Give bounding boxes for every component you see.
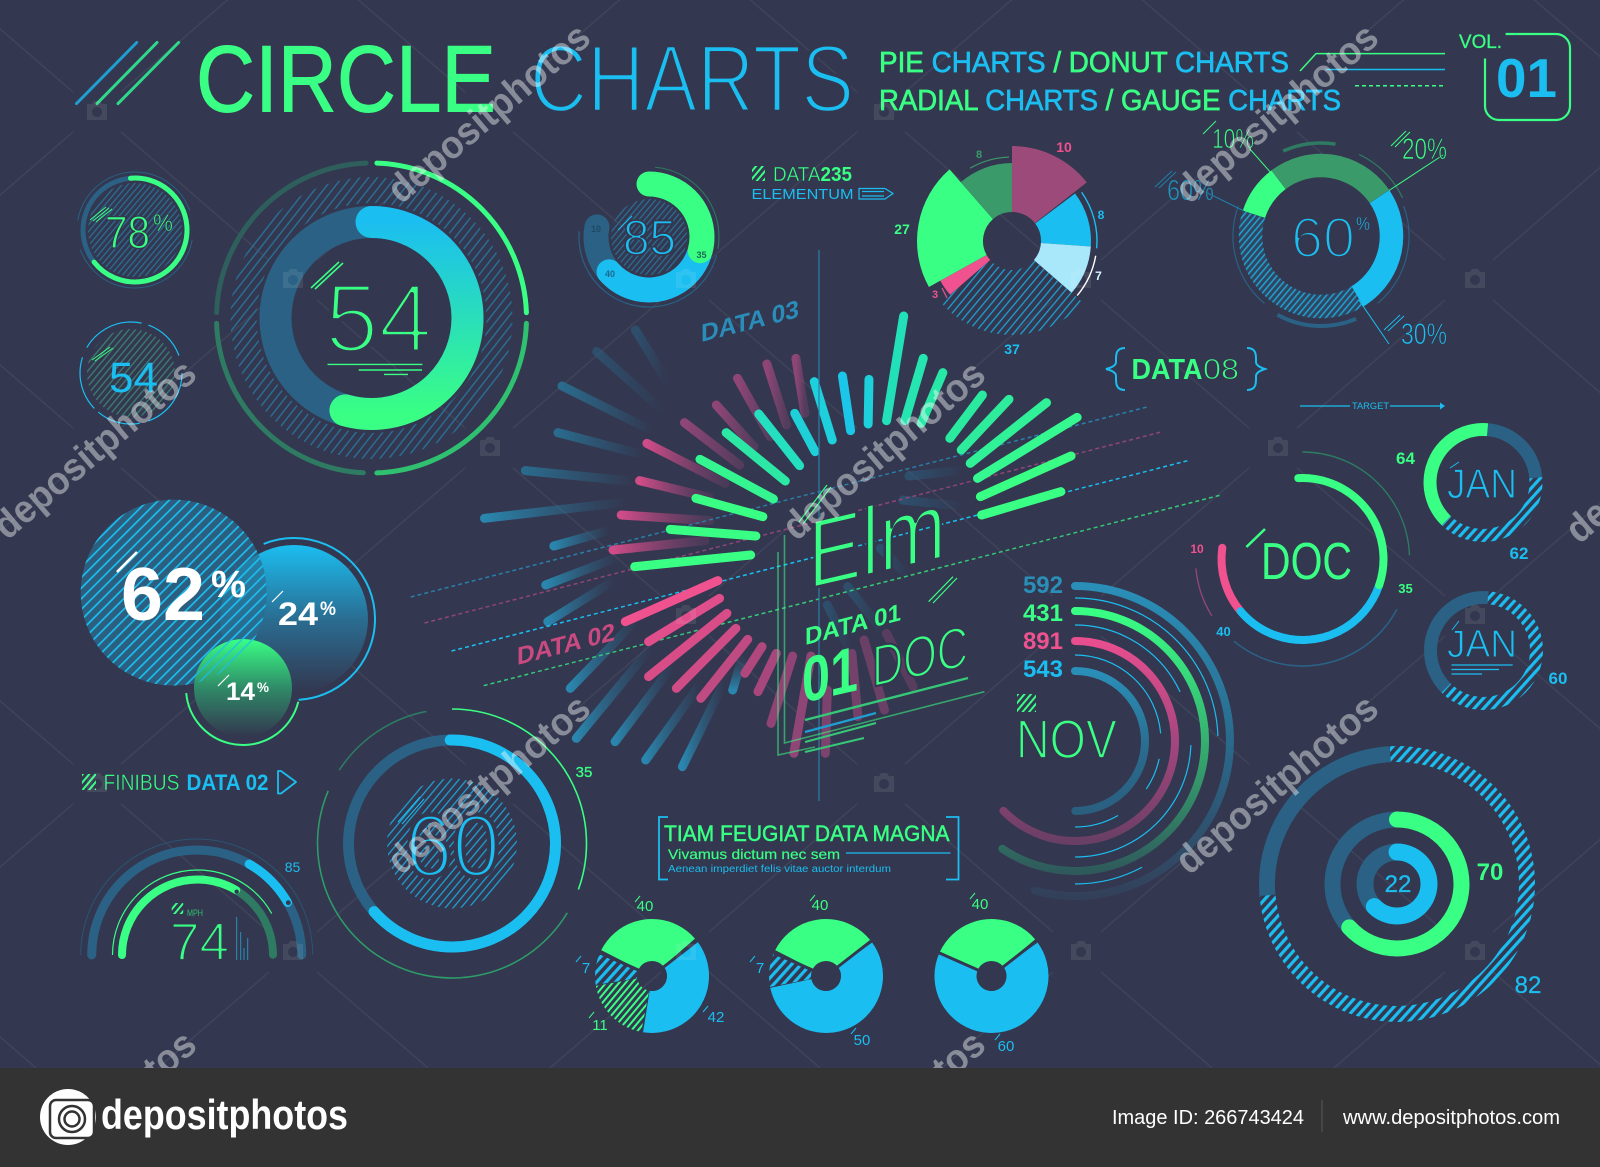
donut: 85: 40: [605, 269, 615, 279]
subtitle: chart types: RADIAL CHARTS / GAUGE CHARTS: [879, 85, 1341, 117]
text block: tiam feugiat: TIAM FEUGIAT DATA MAGNA: [664, 821, 950, 846]
label: finibus data 02: DATA 02: [186, 770, 268, 795]
radial chart: nov: 543: [1023, 656, 1063, 683]
circle labels: %: [211, 564, 246, 606]
pie: 40 7 11 42: 11: [592, 1017, 608, 1034]
volume badge: 01: [1496, 47, 1557, 109]
label: finibus data 02: [82, 770, 296, 795]
radial chart: nov: 431: [1023, 600, 1063, 627]
gauge: jan 60: [1409, 576, 1567, 725]
gauge: 78%: %: [153, 210, 173, 237]
footer bar: [0, 1068, 1600, 1167]
circle labels: %: [320, 599, 336, 620]
gauge: 78%: [68, 163, 202, 297]
text block: tiam feugiat: Aenean imperdiet felis vitae auctor interdum: [668, 864, 891, 875]
dashed data lines: [411, 407, 1221, 686]
gauge: 54 small: [80, 322, 182, 424]
volume badge: [1459, 32, 1570, 120]
donut: 85: 10: [591, 224, 601, 234]
circle labels: %: [257, 679, 270, 695]
circle labels: [117, 552, 336, 706]
watermark text: depositphotos: [379, 686, 599, 883]
burst: radial data lines: [484, 330, 966, 767]
pie: 40 7 11 42: 40: [637, 898, 653, 915]
donut: 85: 35: [696, 250, 707, 260]
circle labels: 24: [278, 596, 318, 632]
label: data235 elementum: ELEMENTUM: [752, 186, 854, 203]
label: data 02: DATA 02: [517, 618, 615, 671]
centre block: Elm data 01 doc: [778, 469, 984, 755]
gauge: doc: 40: [1216, 624, 1231, 639]
header rule lines: [1300, 54, 1445, 86]
donut: big 60: [266, 657, 638, 1030]
circle: 24%: [189, 514, 399, 724]
gauge: jan 64 62: JAN: [1447, 460, 1517, 507]
pie: 40 60: [939, 893, 1042, 1055]
gauge: doc: [1155, 412, 1450, 706]
icon: camera logo: [40, 1089, 96, 1145]
callout: 20%: 20%: [1402, 133, 1447, 166]
outer dim blue spokes: [484, 330, 966, 767]
text block: tiam feugiat: Vivamus dictum nec sem: [668, 846, 840, 862]
gauge: jan 64 62: [1396, 408, 1558, 563]
title: circle charts: [76, 26, 854, 132]
target arrow: TARGET: [1352, 401, 1390, 411]
pie: 40 7 11 42: [576, 896, 724, 1034]
concentric rings: 22 70 82: 70: [1477, 859, 1503, 886]
label: data235 elementum: [752, 164, 893, 203]
label: finibus data 02: FINIBUS: [104, 770, 180, 795]
label: data08: DATA: [1132, 354, 1203, 386]
callout: 10%: 10%: [1212, 123, 1254, 154]
pie chart: radial segments: 10: [1056, 139, 1072, 155]
icon: title slashes: [76, 42, 179, 104]
pie: 40 60: 60: [998, 1038, 1014, 1055]
label: data08: [1106, 348, 1265, 390]
gauge: jan 64 62: 62: [1510, 544, 1528, 563]
pie chart: radial segments: 37: [1004, 341, 1020, 357]
gauge: doc: 35: [1398, 581, 1413, 596]
pie chart: radial segments: 3: [932, 289, 938, 301]
pie: 40 7 50: [750, 895, 876, 1049]
callout: 60%: [1155, 171, 1244, 211]
gauge: 54 small: 54: [109, 354, 158, 402]
outer ring segments: [209, 155, 534, 481]
subtitle: chart types: PIE CHARTS / DONUT CHARTS: [879, 47, 1289, 79]
pie: 40 7 50: 50: [854, 1032, 870, 1049]
donut: 60% with callouts: 60: [1291, 206, 1355, 270]
circle: 62%: [81, 500, 267, 686]
pie: 40 7 50: 7: [756, 960, 764, 977]
pie chart: radial segments: [894, 123, 1130, 359]
radial chart: nov: 891: [1023, 628, 1063, 655]
pie chart: radial segments: 8: [976, 149, 982, 161]
gauge: jan 60: 60: [1549, 669, 1567, 688]
footer bar: www.depositphotos.com: [1342, 1107, 1560, 1129]
radial chart: nov: [882, 548, 1268, 934]
label: data08: 08: [1203, 354, 1239, 386]
radial chart: nov: NOV: [1016, 708, 1117, 770]
thin cyan arcs: [882, 548, 1268, 934]
watermark text: depositphotos: [1167, 15, 1387, 212]
text block: tiam feugiat: [659, 817, 958, 880]
pie: 40 7 50: 40: [812, 897, 828, 914]
centre vertical axis: [818, 250, 820, 801]
watermark text: depositphotos: [774, 352, 994, 549]
circle labels: 14: [226, 678, 255, 706]
pie: 40 7 11 42: 42: [708, 1009, 724, 1026]
pie: 40 60: 40: [972, 896, 988, 913]
gauge: mph 74: 85: [285, 859, 300, 875]
gauge: 78%: 78: [105, 207, 150, 258]
watermark text: depositphotos: [379, 15, 599, 212]
gauge: doc: DOC: [1261, 533, 1352, 591]
circle labels: 62: [121, 552, 205, 636]
gauge: mph 74: 74: [170, 913, 229, 972]
donut: main 54: [209, 155, 534, 481]
label: data235 elementum: DATA235: [773, 164, 852, 186]
pie chart: radial segments: 8: [1098, 208, 1105, 222]
gauge: doc: 10: [1190, 542, 1204, 556]
title: circle charts: CHARTS: [530, 26, 854, 132]
volume badge: VOL.: [1459, 32, 1502, 53]
centre block: Elm data 01 doc: DATA 01: [805, 599, 901, 651]
footer bar: depositphotos: [101, 1091, 348, 1138]
radial chart: nov: 592: [1023, 572, 1063, 599]
target arrow: [1300, 401, 1445, 411]
donut: main 54: 54: [325, 264, 432, 372]
camera marks (watermark): [87, 101, 1485, 960]
concentric rings: 22 70 82: 82: [1515, 972, 1541, 999]
gauge: jan 60: JAN: [1447, 623, 1517, 666]
pie: 40 7 11 42: 7: [582, 960, 590, 977]
callout: 20%: [1389, 131, 1447, 190]
gauge: mph 74: [53, 812, 340, 1098]
donut: 85: [563, 151, 735, 323]
donut: 60% with callouts: %: [1356, 214, 1370, 234]
label: data 03: DATA 03: [701, 295, 799, 348]
dim pink spokes: [613, 358, 913, 753]
pie chart: radial segments: 27: [894, 221, 910, 237]
footer bar: Image ID: 266743424: [1112, 1107, 1304, 1129]
title: circle charts: CIRCLE: [196, 26, 496, 132]
gauge: mph 74: MPH: [187, 908, 203, 918]
donut: big 60: 60: [405, 796, 500, 895]
burst: bright spokes: [625, 316, 1077, 698]
concentric rings: 22 70 82: [1256, 743, 1541, 1025]
centre block: Elm data 01 doc: Elm: [808, 469, 946, 610]
callout: 30%: [1359, 300, 1447, 351]
callout: 10%: [1203, 121, 1272, 174]
callout: 60%: 60%: [1167, 175, 1214, 207]
pie chart: radial segments: 7: [1095, 269, 1102, 283]
circle: 14%: [185, 639, 300, 746]
subtitle: chart types: [879, 47, 1341, 117]
watermark text: depositphotos: [1167, 686, 1387, 883]
callout: 30%: 30%: [1401, 318, 1447, 351]
centre block: Elm data 01 doc: 01: [802, 632, 858, 717]
donut: big 60: 35: [576, 764, 592, 781]
centre block: Elm data 01 doc: DOC: [872, 614, 968, 700]
donut: 85: 85: [623, 212, 676, 266]
concentric rings: 22 70 82: 22: [1385, 871, 1411, 898]
donut: 60% with callouts: [1155, 112, 1447, 360]
gauge: jan 64 62: 64: [1396, 449, 1415, 468]
